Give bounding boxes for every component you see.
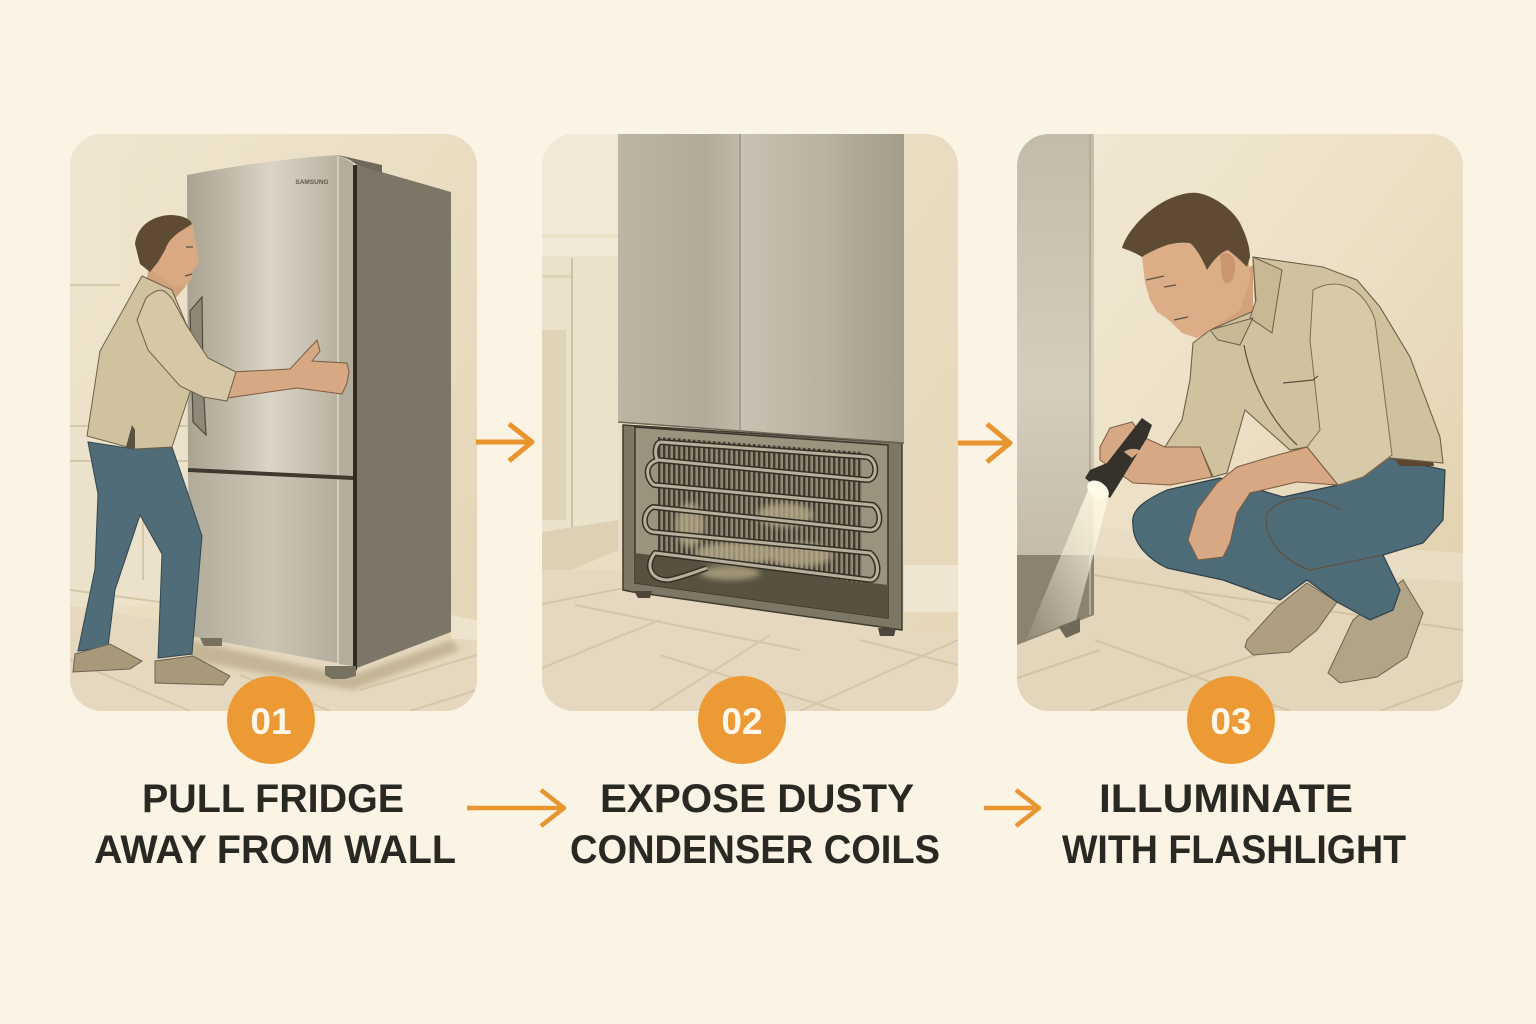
man: jeans (78, 442, 202, 658)
arrow: caption 1 to 2 (467, 790, 564, 826)
fridge shadow (190, 640, 460, 690)
caption 3 (1062, 777, 1406, 872)
housing lower shelf (635, 553, 888, 618)
flashlight beam (1026, 490, 1108, 640)
man: shoes (73, 644, 230, 685)
man: back shoe (1245, 583, 1337, 655)
arrow: panel 2 to 3 (958, 424, 1010, 462)
door edge strip (338, 155, 353, 666)
fridge feet (200, 638, 356, 679)
coil housing frame (623, 425, 902, 630)
fridge lower door (188, 472, 353, 666)
man: sleeve (137, 290, 236, 401)
panel 3: man with flashlight (1017, 134, 1463, 711)
upper cabinet (70, 134, 120, 283)
man: near forearm and hand (1188, 447, 1338, 560)
arrow: caption 2 to 3 (984, 790, 1039, 826)
door handle (190, 297, 206, 435)
floor (70, 638, 477, 711)
fridge foot (1058, 618, 1080, 638)
caption 2: CONDENSER COILS (570, 828, 940, 872)
caption 1: PULL FRIDGE (142, 777, 404, 821)
arrow: panel 1 to 2 (476, 424, 532, 461)
badge 03: 03 (1210, 701, 1252, 742)
floor (1017, 556, 1463, 711)
coil fins (658, 437, 862, 583)
coil tubes (645, 442, 879, 580)
caption 3: ILLUMINATE (1099, 777, 1353, 821)
lower cabinet (118, 550, 162, 606)
badge 03 (1187, 676, 1275, 764)
upper cabinet (542, 134, 618, 234)
fridge top (338, 155, 382, 173)
baseboard (451, 615, 477, 642)
badge 01: 01 (250, 701, 292, 742)
baseboard (1384, 549, 1463, 582)
fridge upper door (187, 155, 353, 477)
man: face marks (185, 247, 193, 276)
man: ear (1220, 253, 1235, 283)
man: neck (147, 270, 186, 298)
fridge body (618, 134, 740, 430)
man: near sleeve (1307, 284, 1392, 485)
man: torso (87, 276, 192, 449)
caption 3: WITH FLASHLIGHT (1062, 828, 1406, 872)
panel 2: dusty condenser coils (542, 134, 958, 711)
man: hair (1122, 193, 1250, 270)
base cabinet (542, 397, 618, 532)
man: jeans (1133, 458, 1445, 620)
floor (542, 682, 954, 711)
baseboard (904, 565, 958, 612)
man: front shoe (1328, 580, 1423, 683)
caption 2: EXPOSE DUSTY (600, 777, 914, 821)
fridge lower dusty section (1017, 555, 1094, 645)
panel 1: man pulling fridge (70, 134, 477, 711)
man: hair (135, 215, 192, 272)
caption 1: AWAY FROM WALL (94, 828, 456, 872)
man: far forearm and hand (1100, 422, 1212, 485)
caption 2 (570, 777, 940, 872)
fridge side (357, 165, 451, 668)
fridge side (1017, 134, 1094, 555)
badge 01 (227, 676, 315, 764)
man: face marks (1146, 276, 1188, 320)
man: head (1142, 225, 1250, 338)
badge 02: 02 (721, 701, 763, 742)
man: neck (1196, 265, 1253, 338)
caption 1 (94, 777, 456, 872)
man: torso and far sleeve (1165, 257, 1443, 485)
man: belt (1392, 455, 1434, 466)
man: head (155, 222, 199, 286)
man: collar and placket (1210, 257, 1282, 345)
badge 02 (698, 676, 786, 764)
flashlight (1084, 418, 1152, 503)
door gap (188, 470, 353, 478)
man: forearm and hand (227, 340, 349, 398)
coil housing interior (635, 427, 888, 618)
dust (676, 503, 832, 580)
brand label: SAMSUNG (295, 179, 329, 186)
fridge feet (634, 591, 896, 636)
